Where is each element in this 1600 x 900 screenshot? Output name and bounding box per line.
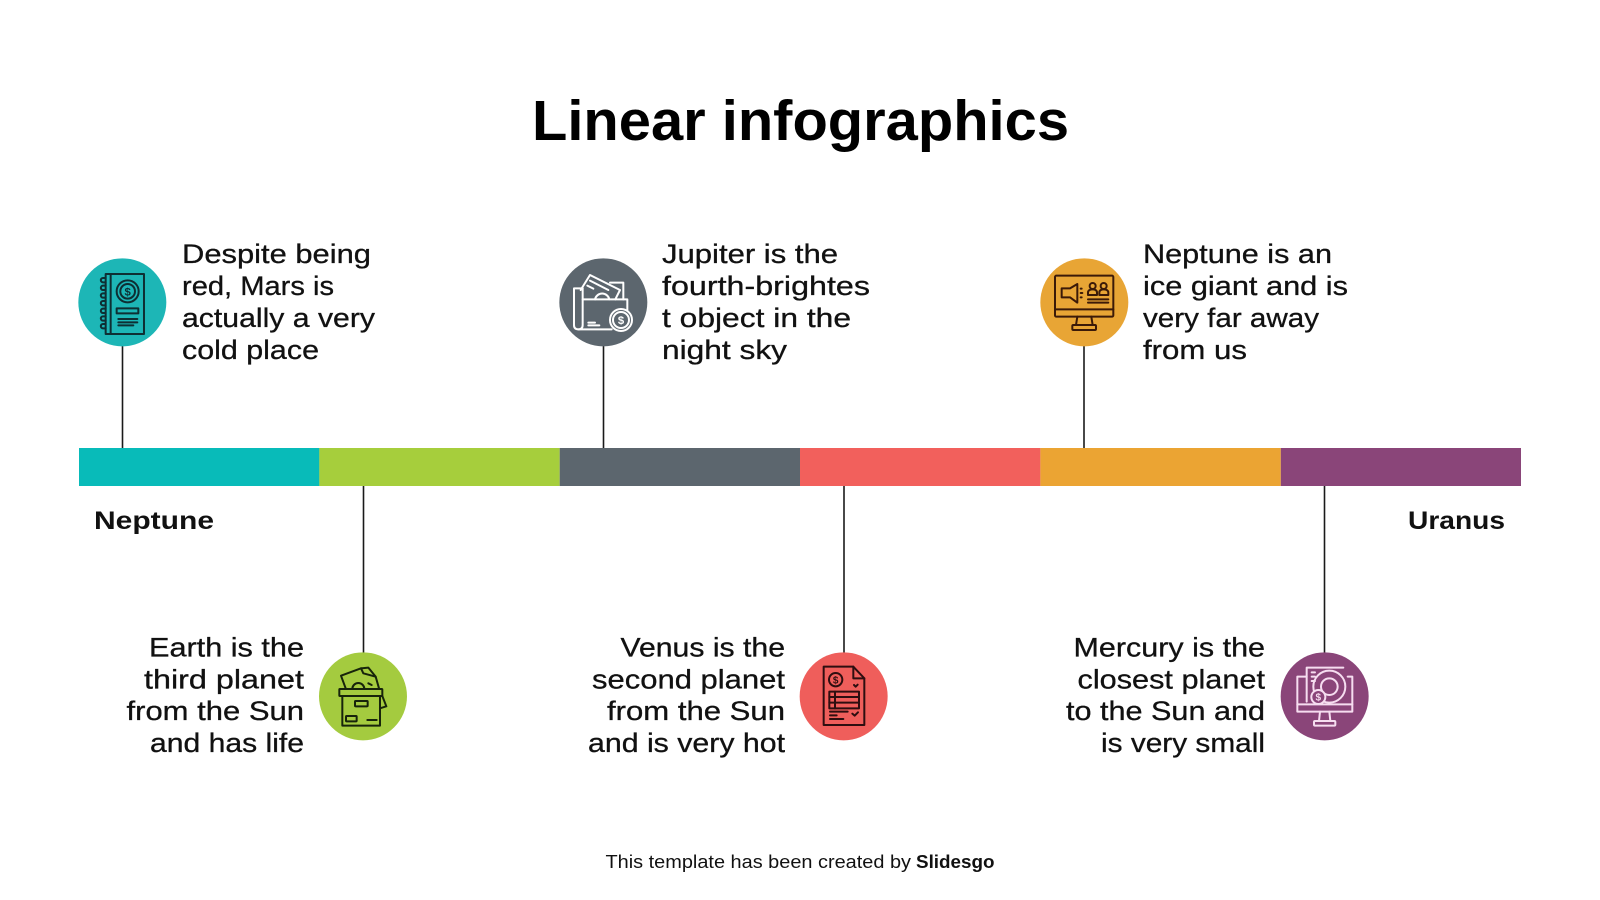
description: [588, 632, 786, 758]
description: to the Sun and: [1066, 696, 1265, 726]
description: from us: [1143, 335, 1247, 365]
description: [662, 239, 870, 365]
connector: [1083, 346, 1085, 448]
description: and is very hot: [588, 728, 786, 758]
connector: [362, 486, 364, 653]
description: [126, 632, 305, 758]
panel: Mars: [78, 239, 376, 448]
icon: wallet: $: [618, 315, 625, 327]
description: second planet: [592, 664, 786, 694]
description: [1066, 632, 1266, 758]
description: very far away: [1143, 303, 1320, 333]
title: Linear infographics: [532, 89, 1069, 153]
footer credit: This template has been created by: [606, 852, 911, 872]
icon: notebook: $: [125, 286, 132, 298]
icon: notebook: [78, 258, 166, 346]
icon: invoice: [800, 652, 888, 740]
description: actually a very: [182, 303, 376, 333]
connector: [1324, 486, 1326, 653]
label: Neptune: Neptune: [94, 507, 214, 535]
description: closest planet: [1078, 664, 1266, 694]
description: [182, 239, 376, 365]
label: Uranus: Uranus: [1408, 507, 1505, 535]
footer credit: Slidesgo: [916, 852, 995, 872]
connector: [843, 486, 845, 653]
description: and has life: [150, 728, 304, 758]
description: cold place: [182, 335, 319, 365]
description: red, Mars is: [182, 271, 334, 301]
panel: Earth: [126, 486, 407, 758]
description: third planet: [144, 664, 305, 694]
panel: Neptune: [1040, 239, 1348, 448]
description: Jupiter is the: [662, 239, 838, 269]
description: from the Sun: [126, 696, 304, 726]
panel: Venus: [588, 486, 888, 758]
icon: monitor with chart: [1281, 652, 1369, 740]
icon: invoice: $: [833, 675, 839, 686]
icon: wallet: [559, 258, 647, 346]
description: Despite being: [182, 239, 371, 269]
description: is very small: [1101, 728, 1265, 758]
icon: monitor with megaphone: [1040, 258, 1128, 346]
description: [1143, 239, 1348, 365]
panel: Mercury: [1066, 486, 1369, 758]
timeline bar: [79, 448, 1521, 486]
connector: [602, 346, 604, 448]
description: Neptune is an: [1143, 239, 1332, 269]
panel: Jupiter: [559, 239, 870, 448]
description: Venus is the: [620, 632, 785, 662]
connector: [122, 346, 124, 448]
description: ice giant and is: [1143, 271, 1348, 301]
description: Earth is the: [149, 632, 304, 662]
description: night sky: [662, 335, 788, 365]
icon: money box: [319, 652, 407, 740]
description: t object in the: [662, 303, 851, 333]
description: fourth-brightes: [662, 271, 870, 301]
icon: monitor with chart: $: [1316, 693, 1322, 704]
description: Mercury is the: [1074, 632, 1265, 662]
description: from the Sun: [607, 696, 785, 726]
